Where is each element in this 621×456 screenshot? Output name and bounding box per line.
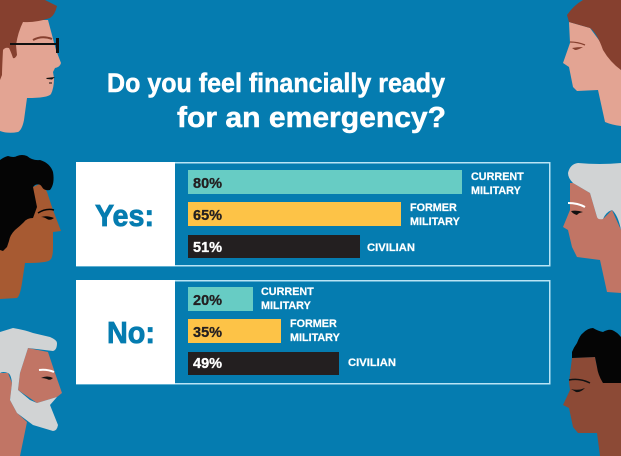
bar: yes former military 65%: 65% <box>193 208 222 224</box>
bar: no current military 20%: MILITARY <box>261 300 312 312</box>
bar: no civilian 49%: 49% <box>193 356 222 372</box>
bar: no current military 20%: CURRENT <box>261 286 314 298</box>
panel: no <box>76 280 550 384</box>
bar: no former military 35%: MILITARY <box>290 332 341 344</box>
panel: yes <box>76 162 550 266</box>
bar: yes former military 65%: MILITARY <box>410 216 461 228</box>
bar: no current military 20% <box>188 286 314 312</box>
title: Do you feel financially ready <box>107 68 445 98</box>
bar: yes former military 65% <box>188 202 461 228</box>
bar: yes former military 65%: FORMER <box>410 202 457 214</box>
bar: yes civilian 51%: 51% <box>193 240 222 256</box>
bar: yes current military 80%: CURRENT <box>471 171 524 183</box>
bar: no former military 35%: FORMER <box>290 318 337 330</box>
no label <box>76 280 175 384</box>
yes label: Yes: <box>95 198 154 233</box>
icon: face middle left with curly hair <box>0 155 61 299</box>
bar: no civilian 49%: CIVILIAN <box>348 357 396 369</box>
bar: no former military 35% <box>188 318 341 344</box>
icon: face bottom left with grey beard <box>0 328 62 456</box>
icon: face bottom right with short dark hair <box>563 328 621 456</box>
bar: no former military 35%: 35% <box>193 325 222 341</box>
yes label <box>76 162 175 266</box>
no label: No: <box>107 315 155 350</box>
bar: yes civilian 51% <box>188 235 415 258</box>
bar: yes civilian 51%: CIVILIAN <box>367 242 415 254</box>
icon: face middle right with grey hair <box>563 163 621 293</box>
bar: yes current military 80%: MILITARY <box>471 185 522 197</box>
bar: yes current military 80% <box>188 170 524 197</box>
bar: no civilian 49% <box>188 352 396 375</box>
title: for an emergency? <box>177 102 446 134</box>
title <box>107 68 446 134</box>
icon: face top left with glasses <box>0 0 61 133</box>
bar: no current military 20%: 20% <box>193 293 222 309</box>
bar: yes current military 80%: 80% <box>193 176 222 192</box>
icon: face top right <box>563 0 621 126</box>
